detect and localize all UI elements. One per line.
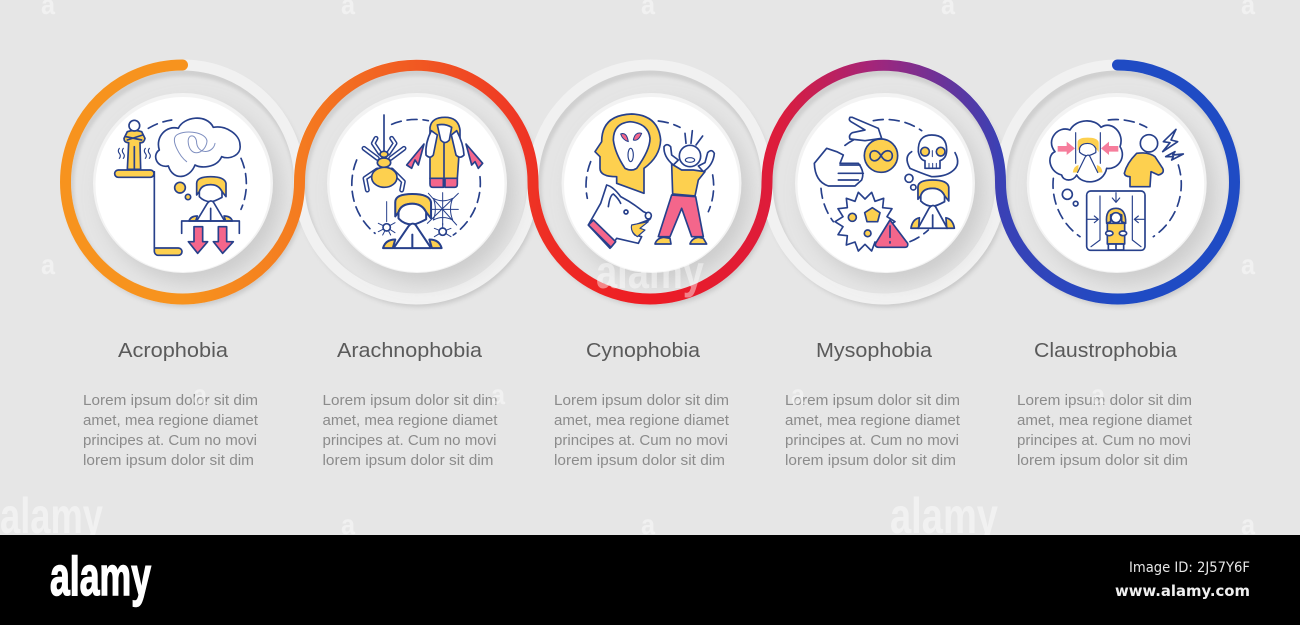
logo: alamy: alamy [50,545,151,607]
watermark pattern: alamy [890,488,998,544]
text block: cynophobia: lorem ipsum dolor sit dim [554,453,725,469]
watermark pattern: a [193,379,207,410]
watermark pattern: a [341,509,355,540]
text block: claustrophobia: principes at. Cum no movi [1017,433,1191,449]
heading: claustrophobia: Claustrophobia [1034,340,1178,362]
text block: acrophobia [83,393,258,469]
ring plate: acrophobia [64,65,306,307]
panel: cynophobia [532,65,774,469]
text block: arachnophobia: principes at. Cum no movi [322,433,496,449]
text block: arachnophobia [322,393,498,469]
ring plate: cynophobia [532,65,774,307]
text block: claustrophobia [1017,393,1192,469]
icon: person on a height with fearful thoughts [115,118,246,255]
text block: claustrophobia: lorem ipsum dolor sit dim [1017,453,1188,469]
text block: cynophobia: amet, mea regione diamet [554,413,729,429]
text block: claustrophobia: Lorem ipsum dolor sit dim [1017,393,1192,409]
icon: spider, web and frightened figures [352,115,483,248]
heading: cynophobia: Cynophobia [586,340,701,362]
text block: mysophobia: lorem ipsum dolor sit dim [785,453,956,469]
text block: acrophobia: Lorem ipsum dolor sit dim [83,393,258,409]
panel: mysophobia [766,65,1008,469]
icon: thought of closing walls, anxious person and trapped figure [1050,120,1183,250]
watermark pattern: a [791,379,805,410]
text block: mysophobia: principes at. Cum no movi [785,433,959,449]
text block: claustrophobia: amet, mea regione diamet [1017,413,1192,429]
panel: arachnophobia [298,65,540,469]
text block: mysophobia: Lorem ipsum dolor sit dim [785,393,960,409]
text block: acrophobia: lorem ipsum dolor sit dim [83,453,254,469]
text block: cynophobia: Lorem ipsum dolor sit dim [554,393,729,409]
watermark pattern: a [641,509,655,540]
footer bar [0,535,1300,625]
heading: acrophobia: Acrophobia [118,340,229,362]
image id: Image ID: 2J57Y6F [1129,560,1250,576]
panel: claustrophobia [999,65,1241,469]
watermark pattern: alamy [596,246,704,298]
watermark pattern: a [1091,379,1105,410]
panel: acrophobia [64,65,306,469]
heading: arachnophobia: Arachnophobia [337,340,483,362]
text block: cynophobia: principes at. Cum no movi [554,433,728,449]
watermark pattern: alamy [0,488,103,544]
text block: arachnophobia: lorem ipsum dolor sit dim [322,453,494,469]
icon: scream mask head, dog and scared person [586,114,714,248]
heading: mysophobia: Mysophobia [816,340,933,362]
text block: cynophobia [554,393,729,469]
text block: acrophobia: principes at. Cum no movi [83,433,257,449]
watermark pattern: a [1241,509,1255,540]
text block: arachnophobia: amet, mea regione diamet [322,413,498,429]
ring plate: claustrophobia [999,65,1241,307]
ring plate: mysophobia [766,65,1008,307]
watermark pattern: a [1241,249,1255,280]
website: www.alamy.com [1115,582,1250,600]
ring plate: arachnophobia [298,65,540,307]
text block: arachnophobia: Lorem ipsum dolor sit dim [322,393,498,409]
text block: mysophobia: amet, mea regione diamet [785,413,960,429]
icon: hand washing, skull, germs and warning [814,117,958,251]
text block: acrophobia: amet, mea regione diamet [83,413,258,429]
watermark pattern: a [41,249,55,280]
text block: mysophobia [785,393,960,469]
ribbon: gradient serpentine line linking all circles [66,65,1235,299]
watermark pattern: a [491,379,505,410]
